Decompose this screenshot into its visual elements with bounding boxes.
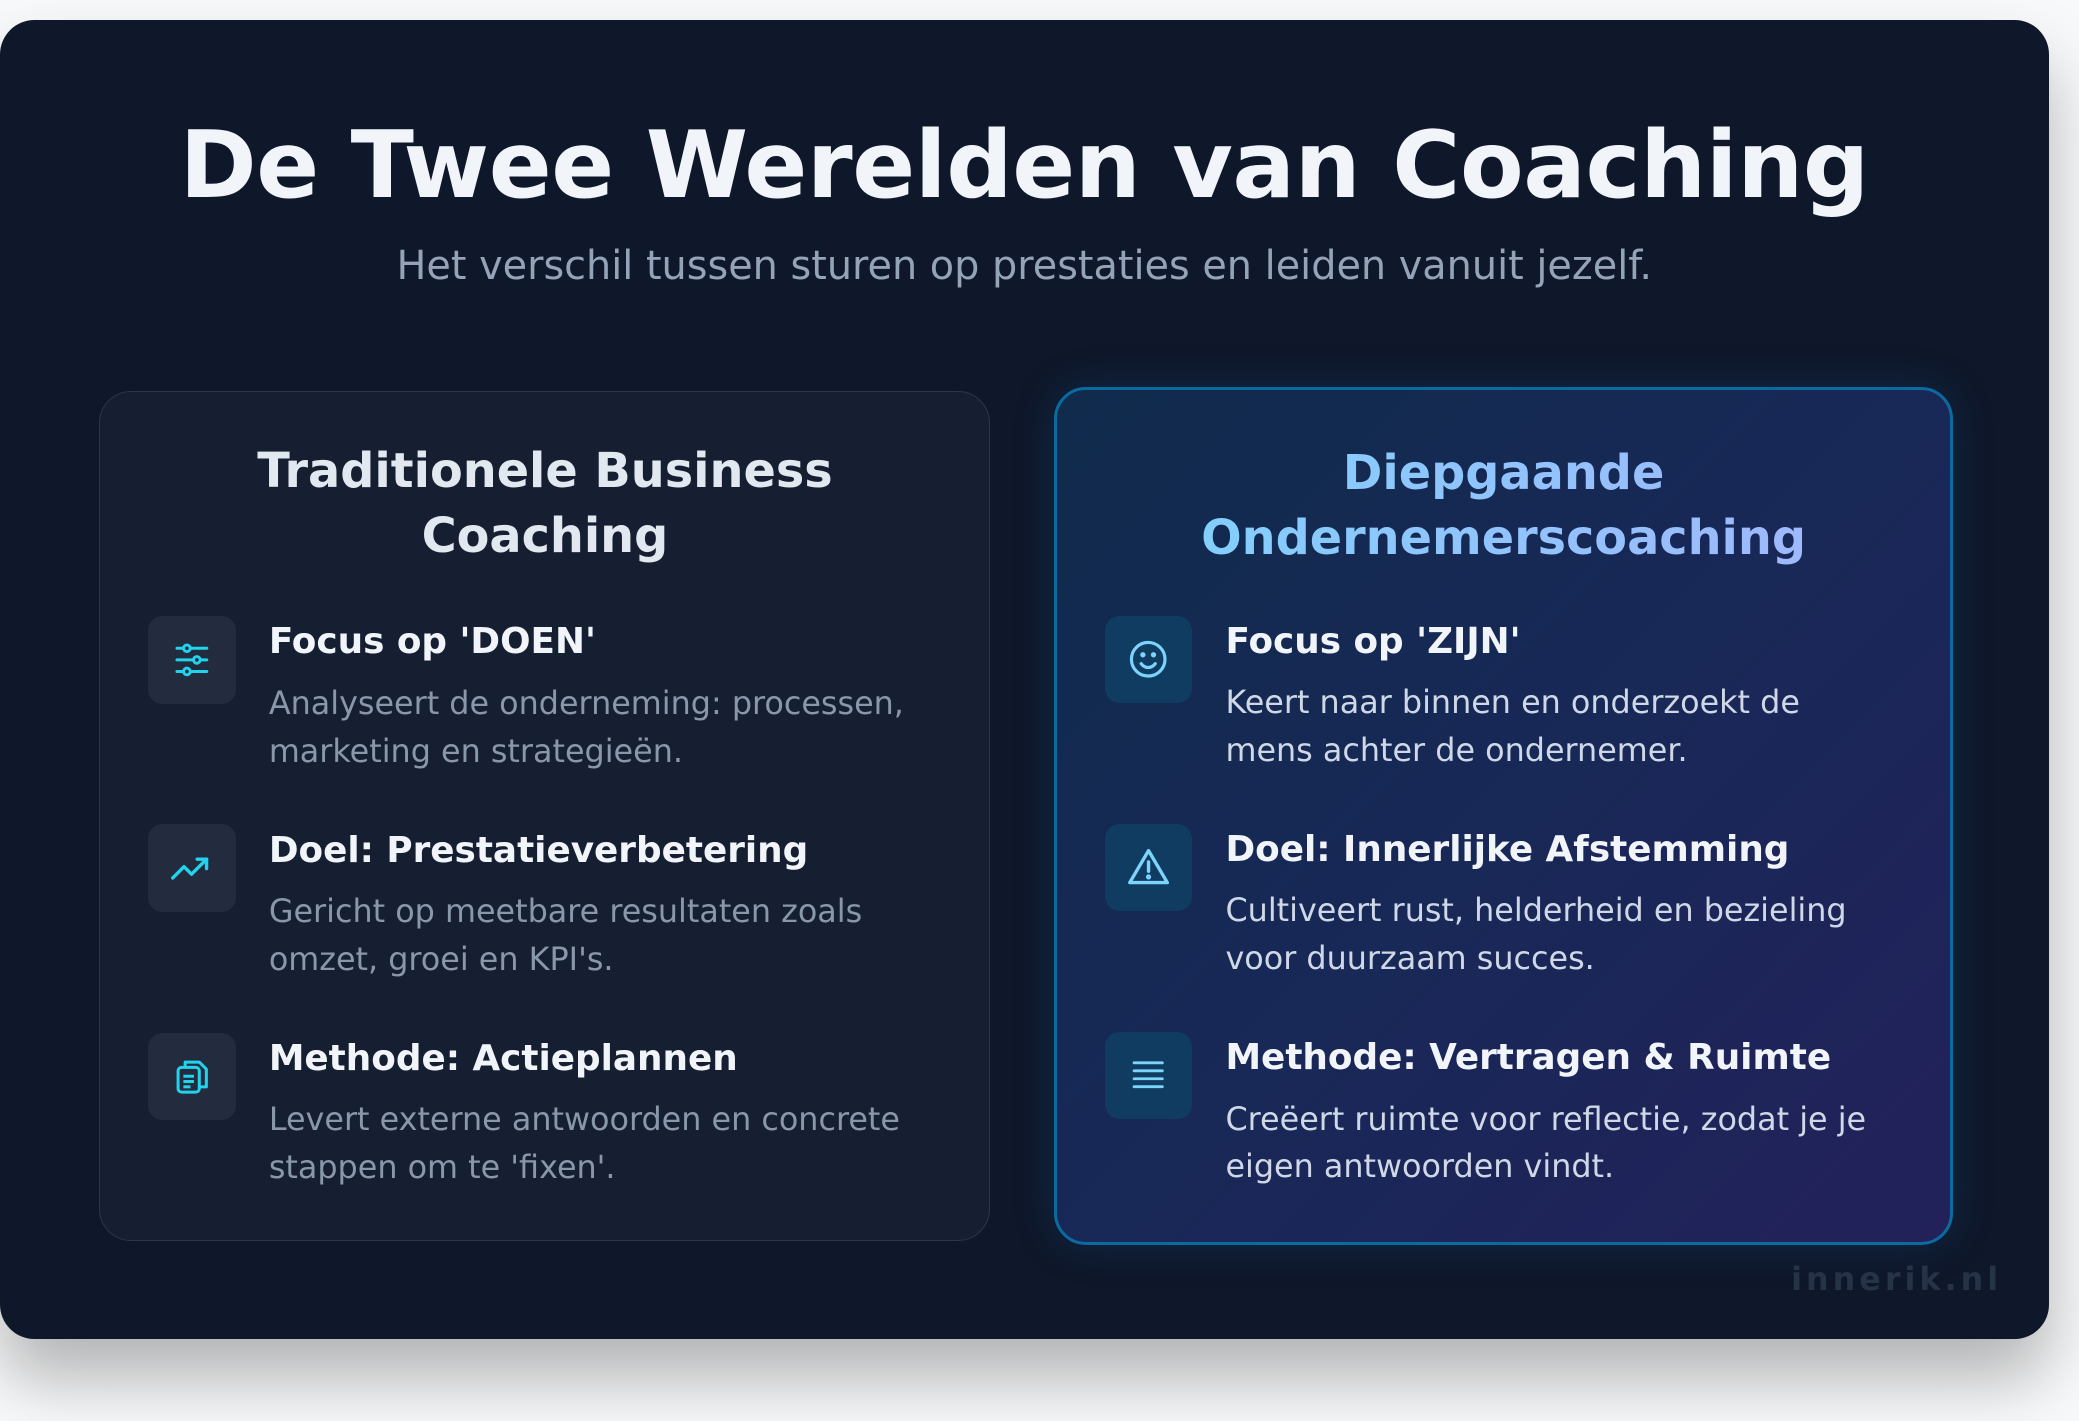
icon: sliders <box>148 616 236 704</box>
item text: Creëert ruimte voor reflectie, zodat je je eigen antwoorden vindt. <box>1225 1100 1866 1185</box>
item: doel prestatie <box>148 824 862 978</box>
item: methode actieplannen <box>148 1033 900 1186</box>
panel heading <box>1057 442 1950 572</box>
item title: Methode: Actieplannen <box>269 1038 738 1079</box>
panel heading: Coaching <box>422 509 668 564</box>
panel: traditional coaching <box>99 391 990 1241</box>
panel heading <box>257 444 833 564</box>
item: methode vertragen <box>1105 1032 1866 1185</box>
item text: Levert externe antwoorden en concrete stappen om te 'fixen'. <box>269 1100 900 1186</box>
icon: trend up <box>148 824 236 912</box>
item title: Focus op 'ZIJN' <box>1225 621 1521 662</box>
item: focus zijn <box>1105 616 1800 769</box>
item title: Methode: Vertragen & Ruimte <box>1225 1037 1831 1078</box>
item title: Doel: Innerlijke Afstemming <box>1225 829 1789 870</box>
item text: Keert naar binnen en onderzoekt de mens achter de ondernemer. <box>1225 683 1800 769</box>
item: focus doen <box>148 616 904 770</box>
panel: deep entrepreneur coaching <box>1054 387 1953 1245</box>
item text: Gericht op meetbare resultaten zoals omzet, groei en KPI's. <box>269 892 862 978</box>
panel heading: Traditionele Business <box>257 444 833 499</box>
item title: Focus op 'DOEN' <box>269 621 596 662</box>
panel heading: Diepgaande <box>1343 446 1664 501</box>
item text: Analyseert de onderneming: processen, marketing en strategieën. <box>269 684 904 770</box>
subtitle: Het verschil tussen sturen op prestaties en leiden vanuit jezelf. <box>396 243 1652 289</box>
item: doel afstemming <box>1105 824 1847 977</box>
watermark: innerik.nl <box>1791 1260 2002 1298</box>
panel heading: Ondernemerscoaching <box>1201 511 1806 566</box>
icon: warning triangle <box>1105 824 1192 911</box>
icon: clipboard <box>148 1033 236 1120</box>
item title: Doel: Prestatieverbetering <box>269 830 808 871</box>
title: De Twee Werelden van Coaching <box>180 111 1869 219</box>
item text: Cultiveert rust, helderheid en bezieling voor duurzaam succes. <box>1225 891 1847 977</box>
icon: smiley <box>1105 616 1192 703</box>
icon: lines <box>1105 1032 1192 1119</box>
